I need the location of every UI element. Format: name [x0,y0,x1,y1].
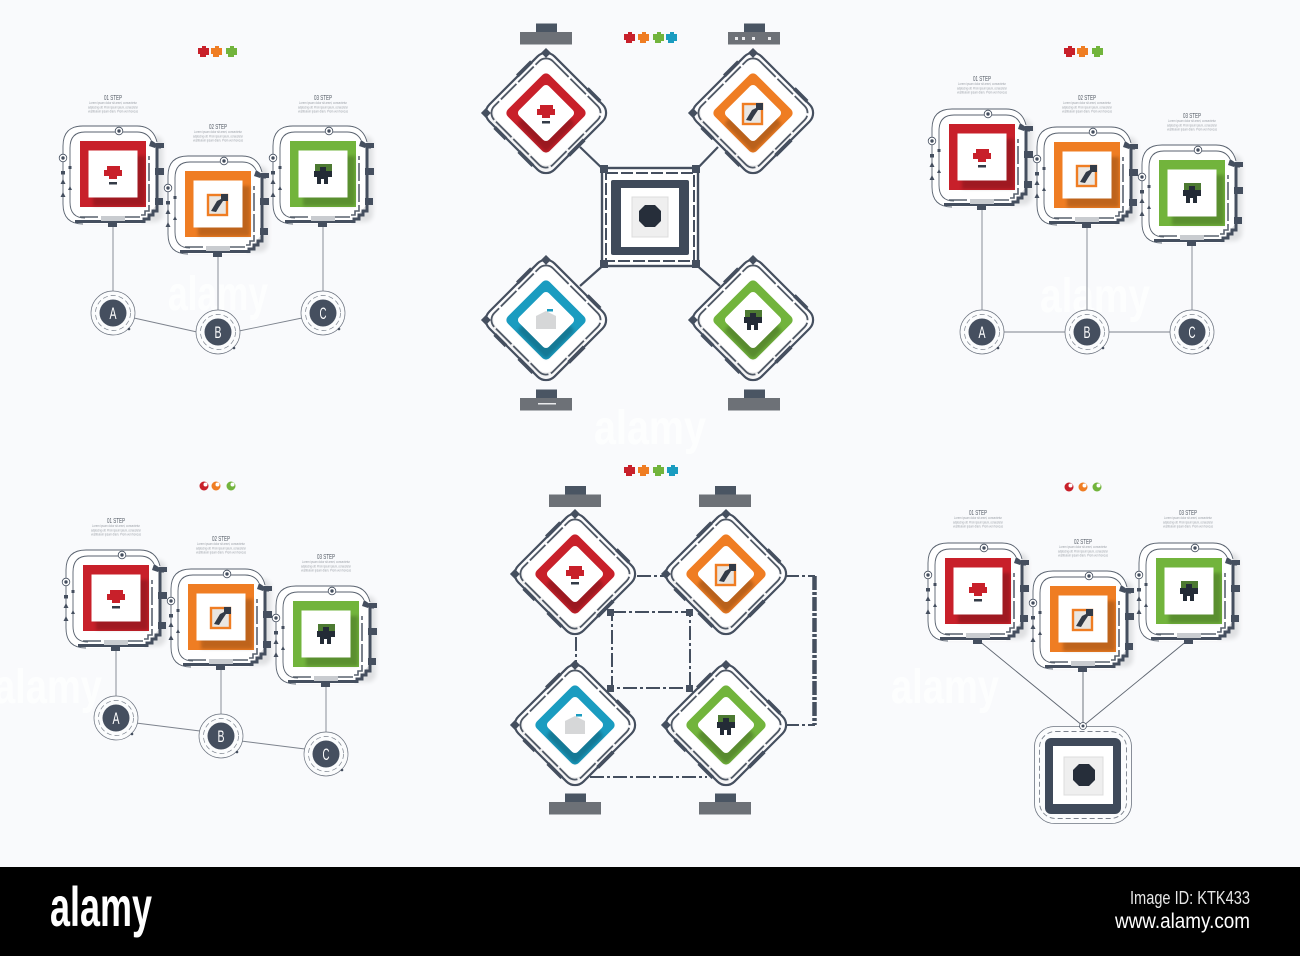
node C: C [322,745,330,764]
diamond: green [687,254,818,385]
image id: Image ID: KTK433 [1130,888,1250,908]
panel: four diamonds with dashed links (bottom centre) [509,465,815,814]
step 2 text [1058,539,1109,558]
watermark [0,268,1150,714]
mini icons [624,32,677,43]
panel: three steps joined to hub (bottom right) [924,482,1240,824]
diamond: orange [660,508,791,639]
step 3 text [1163,510,1214,529]
node B [196,310,240,354]
node A: A [112,709,120,728]
card: green [272,586,377,687]
card: red [928,109,1033,210]
node B: B [217,727,225,746]
step 2 text [193,124,244,143]
footer logo: alamy [50,875,152,938]
step 1 text: 01 STEP [107,518,125,525]
node B: B [1083,323,1091,342]
node C [304,732,348,776]
hub [600,165,700,268]
step 1 text: 01 STEP [104,95,122,102]
connector lines [982,205,1192,332]
node B [1065,310,1109,354]
step 3 text: 03 STEP [1179,510,1197,517]
diamond: red [509,508,640,639]
step 1 text [957,76,1008,95]
node A [960,310,1004,354]
mini icons [1064,482,1102,492]
panel: three steps with descending nodes (bottom left) [62,482,377,776]
diamond: red [480,47,611,178]
step 3 text: 03 STEP [314,95,332,102]
card: green [1135,543,1240,644]
mini icons [200,482,236,490]
node A [91,291,135,335]
step 1 text [953,510,1004,529]
step 3 text [301,554,352,573]
node A: A [109,304,117,323]
step 3 text [298,95,349,114]
card: orange [1029,571,1134,672]
mini icons [198,46,237,57]
node B [199,714,243,758]
hub [1034,722,1132,824]
node C: C [320,304,326,323]
connector lines [580,147,720,286]
panel: three steps with horizontal nodes (top right) [928,46,1243,354]
node C [301,291,345,335]
dashed connector lines [576,576,815,777]
node A [94,696,138,740]
panel: three steps with zigzag nodes (top left) [59,46,374,354]
connector lines [978,640,1188,726]
step 1 text: 01 STEP [973,76,991,83]
diamond: blue [480,254,611,385]
step 3 text: 03 STEP [1183,113,1201,120]
mini icons [1064,46,1103,57]
node C [1170,310,1214,354]
step 3 text: 03 STEP [317,554,335,561]
label pills [549,486,751,814]
watermark: alamy [168,268,268,321]
connector lines [113,222,323,332]
card: orange [164,156,269,257]
step 2 text: 02 STEP [1074,539,1092,546]
connector lines [116,646,326,749]
card: orange [1033,127,1138,228]
mini icons [624,465,678,476]
card: red [59,126,164,227]
watermark: alamy [1040,270,1150,323]
diamond: orange [687,47,818,178]
node A: A [978,323,986,342]
link nodes [607,609,693,692]
footer bar [0,867,1300,956]
step 1 text [88,95,139,114]
step 1 text [91,518,142,537]
card: green [269,126,374,227]
step 2 text: 02 STEP [1078,95,1096,102]
step 1 text: 01 STEP [969,510,987,517]
diamond: green [660,659,791,790]
step 2 text [1062,95,1113,114]
site url: www.alamy.com [1114,910,1250,933]
diamond: blue [509,659,640,790]
step 2 text: 02 STEP [209,124,227,131]
card: orange [167,569,272,670]
watermark: alamy [594,402,706,455]
step 3 text [1167,113,1218,132]
node C: C [1188,323,1196,342]
step 2 text: 02 STEP [212,536,230,543]
card: red [62,550,167,651]
card: green [1138,145,1243,246]
step 2 text [196,536,247,555]
label pills [520,24,780,410]
panel: four diamonds around hub (top centre) [480,24,818,410]
card: red [924,543,1029,644]
watermark: alamy [891,661,999,714]
node B: B [214,323,222,342]
